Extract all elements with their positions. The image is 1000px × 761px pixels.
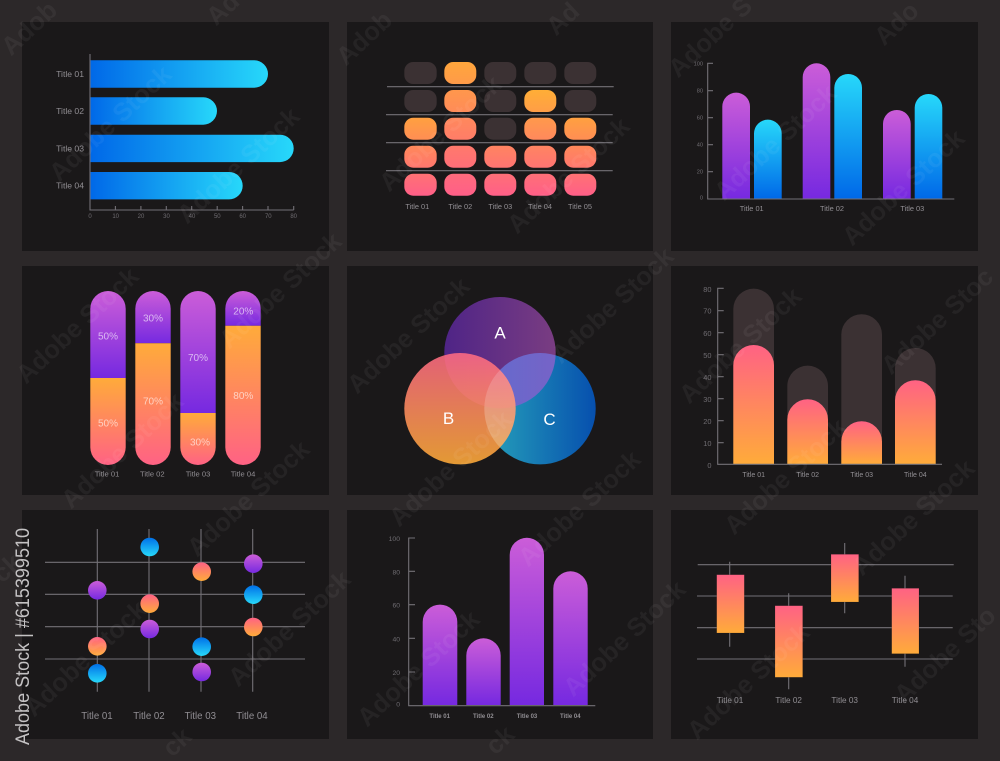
axis numbers: 60 [703, 329, 712, 338]
venn letters [443, 324, 556, 429]
row 4 tiles [404, 146, 596, 168]
axis numbers: 80 [290, 214, 298, 220]
orange dots [88, 562, 263, 656]
repeating stock watermark: Adobe Stock [682, 618, 816, 745]
repeating stock watermark: Adobe Stock [558, 575, 692, 702]
repeating stock watermark: Adobe Stock [374, 70, 508, 197]
candle bodies [717, 554, 919, 677]
axis numbers [703, 285, 712, 470]
axis numbers: 40 [697, 143, 703, 149]
capsule Title 01 [90, 291, 126, 465]
candle labels: Title 01 [717, 696, 744, 705]
purple columns [722, 63, 911, 199]
axis numbers [389, 536, 400, 709]
axis numbers: 0 [396, 702, 400, 709]
capsule labels [95, 470, 255, 479]
column labels: Title 01 [742, 472, 765, 479]
repeating stock watermark: Adobe Stock [546, 242, 680, 369]
percentage labels: 70% [188, 353, 208, 364]
axis numbers: 20 [697, 170, 703, 176]
group labels: Title 01 [740, 204, 764, 213]
percentage labels: 80% [233, 391, 253, 402]
repeating stock watermark: Adob [331, 6, 398, 71]
axes [708, 63, 954, 199]
repeating stock watermark: Adobe Stock [182, 435, 316, 562]
candle labels: Title 03 [831, 696, 858, 705]
repeating stock watermark: Adobe Stock [172, 102, 306, 229]
row 1 tiles [404, 62, 596, 84]
axis numbers: 20 [138, 214, 145, 220]
column labels: Title 01 [81, 711, 113, 722]
capsule labels: Title 02 [140, 470, 165, 479]
column labels: Title 04 [528, 202, 552, 211]
axis numbers: 20 [392, 670, 400, 677]
column labels: Title 02 [448, 202, 472, 211]
axis numbers: 30 [703, 395, 712, 404]
blue dots [88, 538, 263, 683]
axis numbers: 10 [112, 214, 120, 220]
repeating stock watermark: Adobe Stock [384, 405, 518, 532]
column labels: Title 04 [236, 711, 268, 722]
repeating stock watermark: Adobe Stoc [876, 263, 999, 380]
gradient columns [733, 345, 936, 464]
column labels: Title 02 [796, 472, 819, 479]
percentage labels [98, 306, 253, 449]
percentage labels: 50% [98, 419, 118, 430]
axis numbers: 70 [265, 214, 272, 220]
axes [90, 54, 294, 210]
axis numbers: 0 [707, 461, 712, 470]
percentage labels: 20% [233, 306, 253, 317]
candle labels: Title 02 [775, 696, 802, 705]
column labels: Title 04 [560, 714, 581, 720]
vertical stock id caption: Adobe Stock | #615399510 [13, 528, 34, 745]
group labels: Title 02 [820, 204, 844, 213]
group labels [740, 204, 924, 213]
axis numbers: 50 [214, 214, 221, 220]
column labels [405, 202, 592, 211]
candle labels: Title 04 [892, 696, 919, 705]
axes [409, 538, 595, 706]
circle A [444, 297, 556, 408]
repeating stock watermark: Adobe Stock [214, 227, 348, 354]
axis numbers: 80 [703, 285, 712, 294]
category labels: Title 02 [56, 106, 84, 116]
axis numbers: 10 [703, 439, 712, 448]
axis numbers: 100 [389, 536, 400, 543]
circle C [484, 353, 596, 464]
percentage labels: 70% [143, 396, 163, 407]
category labels: Title 04 [56, 180, 84, 190]
axis numbers: 70 [703, 306, 712, 316]
axis numbers [88, 214, 298, 220]
repeating stock watermark: Adobe Stock [719, 413, 853, 540]
capsule Title 04 [225, 291, 261, 465]
repeating stock watermark: Adobe Stock [674, 282, 808, 409]
axes [718, 288, 942, 464]
column labels: Title 03 [517, 714, 538, 720]
axis numbers: 30 [163, 214, 170, 220]
column labels: Title 05 [568, 202, 592, 211]
column labels [81, 711, 268, 722]
axis numbers: 100 [694, 61, 703, 67]
category labels: Title 01 [56, 69, 84, 79]
repeating stock watermark: ck [480, 720, 521, 760]
axis numbers: 0 [88, 214, 92, 220]
purple columns [423, 538, 588, 705]
panel: dot matrix chart [22, 510, 329, 739]
blue horizontal bars [90, 60, 294, 199]
axis numbers: 60 [697, 116, 703, 122]
row 2 tiles [404, 90, 596, 112]
axis numbers: 40 [189, 214, 196, 220]
axis numbers: 80 [697, 89, 703, 95]
axis numbers: 60 [392, 603, 400, 610]
repeating stock watermark: Adobe Stock [502, 112, 636, 239]
repeating stock watermark: Adobe Stock [709, 79, 843, 206]
column labels: Title 02 [133, 711, 165, 722]
candle labels [717, 696, 919, 705]
repeating stock watermark: Adobe Stock [847, 454, 981, 581]
axis numbers [694, 61, 703, 201]
backdrop columns [733, 289, 936, 464]
group labels: Title 03 [900, 204, 924, 213]
panel: venn diagram [347, 266, 653, 495]
repeating stock watermark: Adobe Stock [19, 595, 153, 722]
repeating stock watermark: Adobe Stock [44, 60, 178, 187]
percentage labels: 30% [190, 438, 210, 449]
capsule labels: Title 03 [186, 470, 210, 479]
column labels: Title 04 [904, 472, 927, 479]
panel: grouped column chart [671, 22, 978, 251]
panel: purple column chart [347, 510, 653, 739]
repeating stock watermark: Adobe Stock [352, 605, 486, 732]
panel: stacked capsule chart [22, 266, 329, 495]
category labels [56, 69, 84, 190]
repeating stock watermark: Adobe Stock [513, 445, 647, 572]
blue columns [754, 74, 942, 199]
repeating stock watermark: Adobe Sto [889, 602, 1000, 709]
capsule labels: Title 01 [95, 470, 119, 479]
axis numbers: 80 [392, 569, 400, 576]
capsule Title 02 [135, 291, 171, 465]
repeating stock watermark: Adobe Stock [11, 262, 145, 389]
column labels: Title 03 [488, 202, 512, 211]
capsule labels: Title 04 [231, 470, 255, 479]
column labels: Title 02 [473, 714, 494, 720]
venn letters: A [494, 324, 506, 342]
column labels: Title 03 [850, 472, 873, 479]
overlap B and C [484, 370, 516, 447]
percentage labels: 30% [143, 313, 163, 324]
panel: horizontal bar chart [22, 22, 329, 251]
panel: candlestick chart [671, 510, 978, 739]
axis numbers: 20 [703, 417, 712, 426]
circle B [404, 353, 516, 464]
axis numbers: 0 [700, 195, 703, 201]
column labels: Title 03 [185, 711, 216, 722]
repeating stock watermark: Adobe Stock [56, 387, 190, 514]
venn letters: B [443, 409, 454, 428]
panel: column chart with backdrop [671, 266, 978, 495]
axis numbers: 40 [703, 373, 712, 382]
percentage labels: 50% [98, 332, 118, 343]
column labels [429, 714, 581, 720]
axis numbers: 60 [239, 214, 247, 220]
purple dots [88, 554, 263, 681]
repeating stock watermark: Adobe Stock [223, 565, 357, 692]
repeating stock watermark: Adobe Stock [342, 272, 476, 399]
row 3 tiles [404, 118, 596, 140]
column labels: Title 01 [405, 202, 429, 211]
category labels: Title 03 [56, 143, 84, 153]
venn letters: C [543, 410, 556, 429]
repeating stock watermark: Adobe Stock [837, 124, 971, 251]
panel: tile grid chart [347, 22, 653, 251]
row 5 tiles [404, 174, 596, 196]
axis numbers: 40 [392, 636, 400, 643]
column labels [742, 472, 927, 479]
axis numbers: 50 [703, 351, 712, 360]
capsule Title 03 [180, 291, 216, 465]
column labels: Title 01 [429, 714, 451, 720]
